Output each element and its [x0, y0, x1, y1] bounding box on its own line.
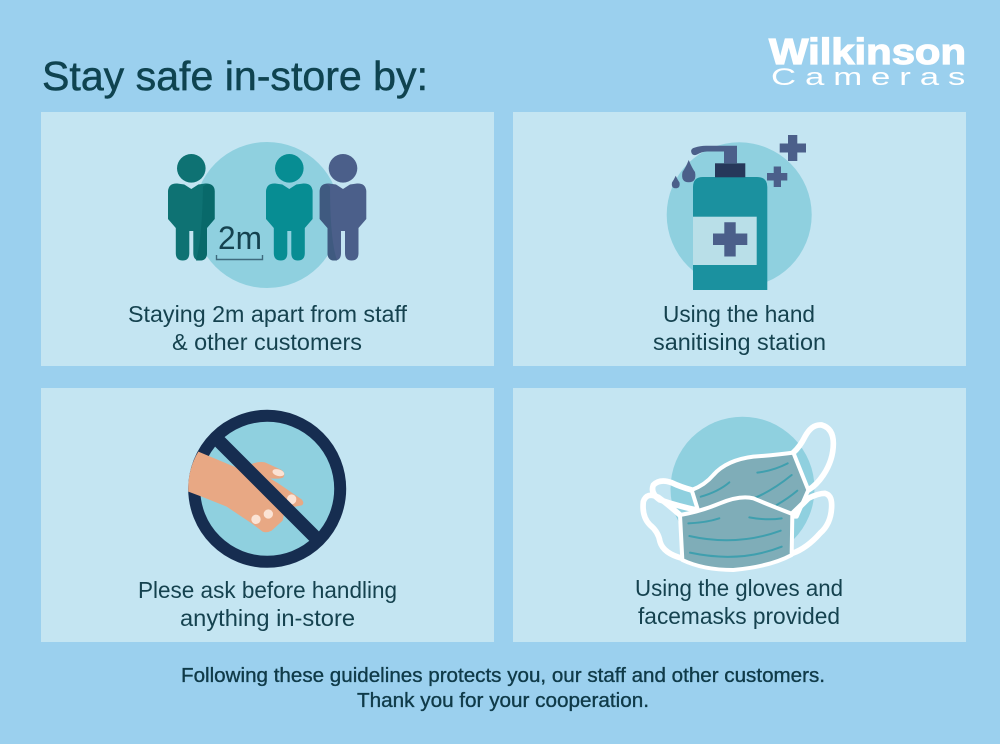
footer message — [181, 665, 825, 712]
panel: hand sanitiser — [513, 112, 966, 366]
caption: ask first: Plese ask before handling — [138, 577, 397, 603]
logo: Wilkinson Cameras: Cameras — [771, 64, 965, 91]
panel: gloves and facemasks — [513, 388, 966, 642]
panel: staying 2m apart — [41, 112, 494, 366]
footer message: Following these guidelines protects you, our staff and other customers. — [181, 665, 825, 687]
footer message: Thank you for your cooperation. — [357, 690, 649, 712]
logo: Wilkinson Cameras — [769, 31, 966, 91]
caption: sanitising: sanitising station — [653, 329, 826, 355]
logo: Wilkinson Cameras: Wilkinson — [769, 31, 966, 72]
caption: staying apart: Staying 2m apart from staff — [128, 301, 408, 327]
caption: gloves and masks — [635, 575, 843, 629]
caption: sanitising — [653, 301, 826, 355]
caption: staying apart — [128, 301, 408, 355]
icon: two facemasks — [643, 417, 833, 570]
title: Stay safe in-store by: — [42, 53, 428, 99]
caption: sanitising: Using the hand — [663, 301, 815, 327]
caption: ask first — [138, 577, 397, 631]
icon: sanitiser bottle — [667, 135, 812, 290]
panel: ask before handling — [41, 388, 494, 642]
caption: gloves and masks: facemasks provided — [638, 603, 840, 629]
caption: ask first: anything in-store — [180, 605, 355, 631]
icon: three people 2m apart — [168, 142, 366, 288]
caption: gloves and masks: Using the gloves and — [635, 575, 843, 601]
icon: no-touch sign with hand — [188, 416, 340, 562]
icon: three people 2m apart: 2m — [218, 220, 262, 256]
caption: staying apart: & other customers — [172, 329, 362, 355]
